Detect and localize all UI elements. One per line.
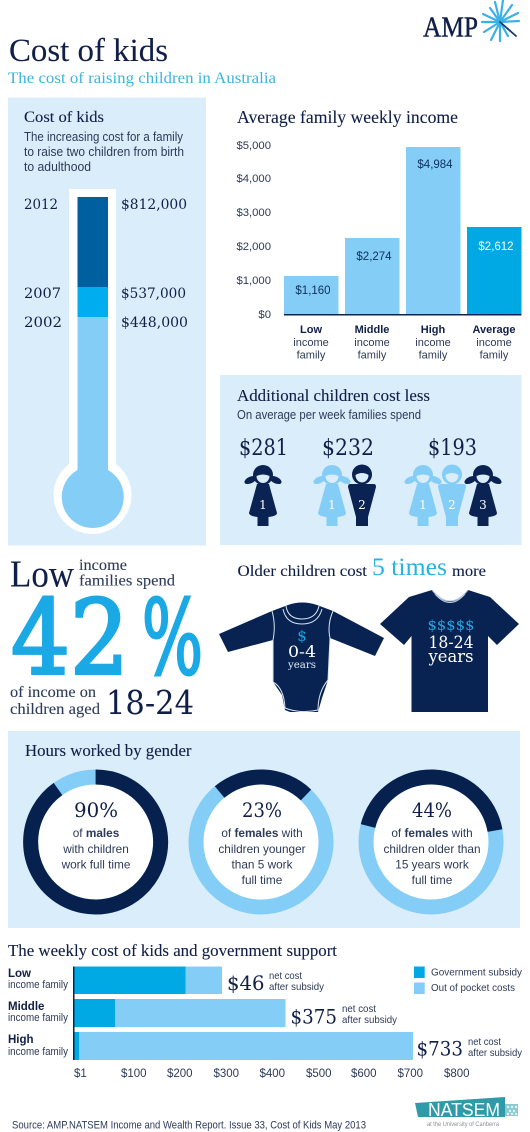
x axis labels: $800: [444, 1068, 470, 1080]
big number: [11, 578, 203, 698]
icon: two children: [312, 464, 376, 526]
net cost labels: after subsidy: [468, 1047, 523, 1059]
callout: low income families spend 42%: of income on: [10, 684, 96, 701]
callout: low income families spend 42%: income: [79, 557, 127, 574]
y axis labels: $4,000: [236, 173, 271, 185]
chart: weekly cost of kids and government support: [8, 941, 523, 1080]
x axis labels: [74, 1068, 470, 1080]
x axis labels: $1: [74, 1068, 87, 1080]
bar values: $2,612: [478, 241, 514, 253]
panel: cost of kids thermometer: [8, 98, 206, 546]
chart heading: Average family weekly income: [237, 107, 458, 127]
category labels: High: [421, 324, 445, 336]
icon: adult t-shirt: years: [428, 647, 474, 667]
row labels: income family: [8, 979, 68, 991]
source note: Source: AMP.NATSEM Income and Wealth Report. Issue 33, Cost of Kids May 2013: [12, 1120, 366, 1132]
heading: older children cost 5 times more: [238, 554, 486, 581]
donut: 90% of males: [31, 777, 161, 907]
amounts: $281: [239, 436, 288, 461]
callout: low income families spend 42%: children aged: [10, 701, 100, 718]
legend: Government subsidy: [431, 966, 523, 978]
thermometer labels: $812,000: [121, 197, 187, 213]
category labels: family: [480, 350, 509, 362]
icon: one child: [243, 465, 283, 526]
y axis labels: $5,000: [236, 140, 271, 152]
icon: two children: 1: [328, 498, 336, 512]
net cost labels: $733: [416, 1036, 463, 1060]
bar chart: average family weekly income: [236, 107, 522, 362]
heading: older children cost 5 times more: 5 times: [372, 554, 447, 581]
legend: Out of pocket costs: [431, 982, 515, 994]
x axis labels: $400: [260, 1068, 285, 1080]
row labels: income family: [8, 1046, 68, 1058]
category labels: Low: [300, 324, 322, 336]
bar values: $2,274: [356, 251, 392, 263]
row labels: [8, 968, 68, 1058]
x axis labels: $300: [214, 1068, 239, 1080]
thermometer labels: [24, 197, 188, 331]
legend: [414, 966, 523, 994]
net cost labels: net cost: [468, 1036, 501, 1048]
category labels: income: [293, 337, 329, 349]
panel description: [24, 130, 184, 174]
icon: baby onesie: [219, 602, 384, 712]
net cost labels: net cost: [269, 970, 302, 982]
heading: older children cost 5 times more: Older children cost: [238, 563, 368, 580]
x axis labels: $100: [121, 1068, 147, 1080]
callout: low income families spend 42%: 18-24: [106, 683, 194, 722]
icon: baby onesie: $: [297, 627, 307, 645]
net cost labels: after subsidy: [342, 1014, 398, 1026]
panel description: to adulthood: [24, 160, 91, 174]
callout: low income families spend 42%: families spend: [79, 572, 175, 590]
icon: baby onesie: 0-4: [288, 642, 316, 661]
icon: three children: 3: [479, 498, 487, 512]
logo: NATSEM: at the University of Canberra: [427, 1122, 500, 1128]
icon: two children: 2: [358, 498, 366, 512]
heading: older children cost 5 times more: more: [452, 563, 486, 580]
donut: 44% of females: 44%: [412, 798, 452, 822]
net cost labels: $46: [227, 971, 264, 995]
donut: 23% of females: than 5 work: [232, 858, 293, 872]
thermometer labels: 2007: [24, 286, 61, 302]
icon: baby onesie: years: [287, 660, 316, 671]
panel description: to raise two children from birth: [24, 145, 184, 159]
icon: three children: 1: [419, 498, 427, 512]
logo: NATSEM: NATSEM: [428, 1100, 500, 1120]
net cost labels: after subsidy: [269, 981, 325, 993]
subtitle: The cost of raising children in Australia: [8, 70, 276, 87]
y axis labels: $1,000: [236, 275, 271, 287]
x axis labels: $600: [351, 1068, 377, 1080]
x axis labels: $500: [306, 1068, 332, 1080]
donut: 90% of males: with children: [62, 842, 129, 856]
panel heading: Hours worked by gender: [25, 741, 192, 760]
donut: 44% of females: 15 years work: [395, 858, 469, 872]
bar values: [295, 159, 514, 297]
thermometer: [54, 189, 132, 534]
thermometer labels: $448,000: [121, 315, 188, 331]
category labels: income: [415, 337, 451, 349]
callout: low income families spend 42%: [10, 554, 203, 722]
net cost labels: [227, 970, 523, 1060]
callout: low income families spend 42%: Low: [10, 554, 75, 596]
category labels: [293, 324, 516, 362]
category labels: Middle: [355, 324, 389, 336]
logo: AMP: AMP: [423, 12, 478, 44]
row labels: income family: [8, 1012, 68, 1024]
panel: hours worked by gender: [8, 731, 520, 928]
icon: one child: 1: [259, 498, 267, 512]
donut: 23% of females: [196, 777, 326, 907]
thermometer labels: 2012: [24, 197, 58, 213]
category labels: family: [358, 350, 387, 362]
y axis labels: $0: [258, 309, 271, 321]
stacked bars: [73, 966, 413, 1060]
panel subheading: On average per week families spend: [237, 408, 421, 422]
x axis labels: $700: [398, 1068, 423, 1080]
donut: 90% of males: of males: [73, 826, 120, 840]
amounts: $232: [322, 436, 374, 461]
net cost labels: net cost: [342, 1003, 376, 1015]
category labels: income: [354, 337, 390, 349]
bars: [284, 147, 522, 316]
big number: %: [142, 578, 203, 698]
panel heading: Additional children cost less: [237, 386, 430, 405]
donut: 23% of females: 23%: [242, 798, 282, 822]
category labels: family: [419, 350, 448, 362]
bar values: $1,160: [295, 285, 331, 297]
donut: 23% of females: of females with: [221, 826, 303, 840]
donut: 90% of males: 90%: [74, 798, 118, 822]
icon: three children: [403, 464, 503, 526]
big number: 42: [11, 578, 129, 698]
donut: 44% of females: full time: [412, 873, 453, 887]
net cost labels: $375: [290, 1004, 337, 1028]
logo: AMP: [423, 0, 519, 44]
amounts: $193: [428, 436, 477, 461]
donut: 23% of females: full time: [242, 873, 283, 887]
x axis labels: $200: [167, 1068, 193, 1080]
icon: three children: 2: [448, 498, 456, 512]
panel: additional children cost less: [220, 375, 522, 545]
icon: adult t-shirt: 18-24: [428, 633, 474, 653]
category labels: income: [476, 337, 512, 349]
amounts: [239, 436, 477, 461]
row labels: High: [8, 1034, 34, 1046]
icon: adult t-shirt: $$$$$: [428, 618, 474, 634]
donut: 90% of males: work full time: [61, 858, 131, 872]
title: Cost of kids: [9, 33, 168, 69]
category labels: Average: [472, 324, 516, 336]
row labels: Middle: [8, 1001, 44, 1013]
donut: 23% of females: children younger: [218, 842, 306, 856]
y axis labels: $2,000: [236, 241, 271, 253]
category labels: family: [297, 350, 326, 362]
donut: 44% of females: [366, 777, 496, 907]
donut: 44% of females: children older than: [383, 842, 481, 856]
y axis labels: [236, 140, 271, 321]
donut: 44% of females: of females with: [391, 826, 473, 840]
row labels: Low: [8, 968, 31, 980]
panel description: The increasing cost for a family: [24, 130, 184, 144]
bar values: $4,984: [417, 159, 453, 171]
panel heading: Cost of kids: [24, 109, 104, 126]
chart heading: The weekly cost of kids and government support: [8, 941, 337, 960]
thermometer labels: 2002: [24, 315, 62, 331]
icon: adult t-shirt: [380, 590, 519, 712]
logo: NATSEM: [415, 1097, 518, 1128]
y axis labels: $3,000: [236, 207, 271, 219]
thermometer labels: $537,000: [121, 286, 186, 302]
